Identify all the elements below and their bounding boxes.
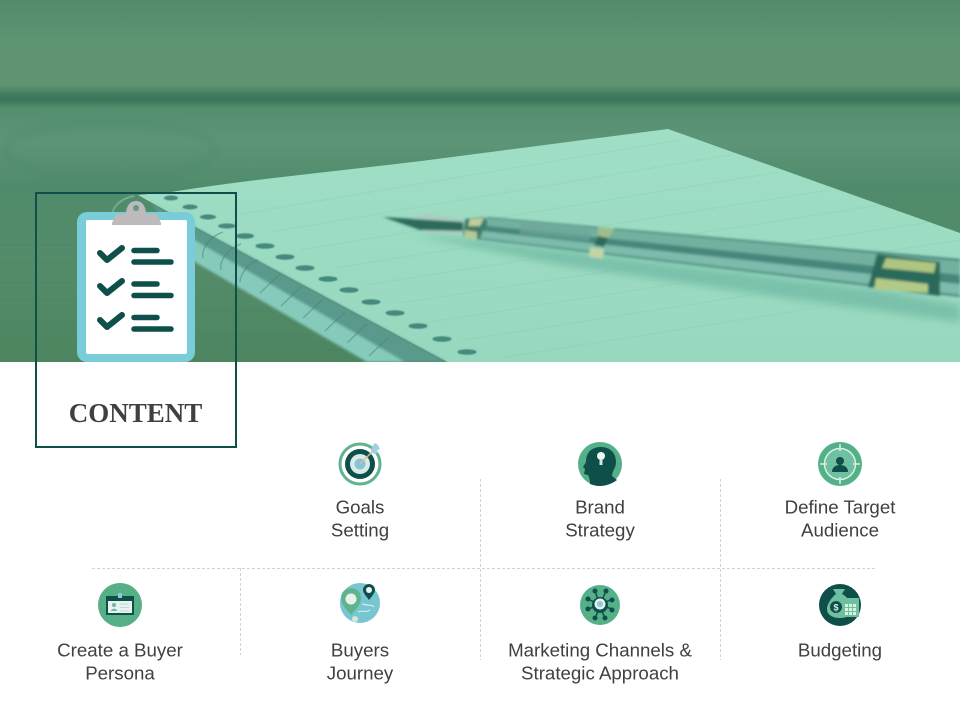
icon: marketing channels network bbox=[580, 585, 620, 625]
label: Brand Strategy: Brand bbox=[575, 496, 625, 518]
icon: budgeting money bag: $ bbox=[833, 602, 839, 612]
pen rings bbox=[463, 217, 486, 240]
notebook punched holes bbox=[164, 196, 476, 355]
notebook spiral binding bbox=[150, 203, 447, 362]
icon: clipboard clip bbox=[112, 201, 161, 225]
icon: buyers journey map pins bbox=[340, 583, 380, 623]
notebook ruled lines bbox=[237, 140, 960, 308]
icon: define target audience bbox=[818, 442, 862, 486]
notebook page bbox=[138, 129, 960, 362]
label: Goals Setting: Goals bbox=[336, 496, 384, 518]
label: Goals Setting: Setting bbox=[331, 520, 389, 540]
label: Marketing Channels & Strategic Approach: Marketing Channels & bbox=[508, 640, 692, 660]
label: Marketing Channels & Strategic Approach: Strategic Approach bbox=[521, 662, 679, 684]
heading: CONTENT: CONTENT bbox=[69, 398, 202, 428]
fountain pen bbox=[383, 213, 960, 297]
label: Budgeting: Budgeting bbox=[798, 640, 882, 660]
icon: clipboard with checklist bbox=[77, 201, 195, 362]
icon: buyer persona id card bbox=[98, 583, 142, 627]
label: Create a Buyer Persona: Create a Buyer bbox=[57, 640, 183, 660]
icon: goals target bbox=[340, 443, 380, 484]
label: Brand Strategy: Strategy bbox=[565, 520, 635, 540]
frame around content title bbox=[36, 193, 236, 447]
pen shadow bbox=[410, 234, 960, 322]
icon: brand strategy head bbox=[578, 442, 622, 486]
checklist rows bbox=[100, 248, 171, 329]
label: Define Target Audience: Define Target bbox=[785, 496, 895, 518]
label: Buyers Journey: Journey bbox=[327, 662, 394, 684]
label: Create a Buyer Persona: Persona bbox=[85, 662, 155, 684]
label: Buyers Journey: Buyers bbox=[331, 640, 389, 660]
label: Define Target Audience: Audience bbox=[801, 520, 879, 540]
hero photo: notebook and fountain pen bbox=[0, 0, 960, 362]
icon: budgeting money bag bbox=[819, 584, 861, 626]
